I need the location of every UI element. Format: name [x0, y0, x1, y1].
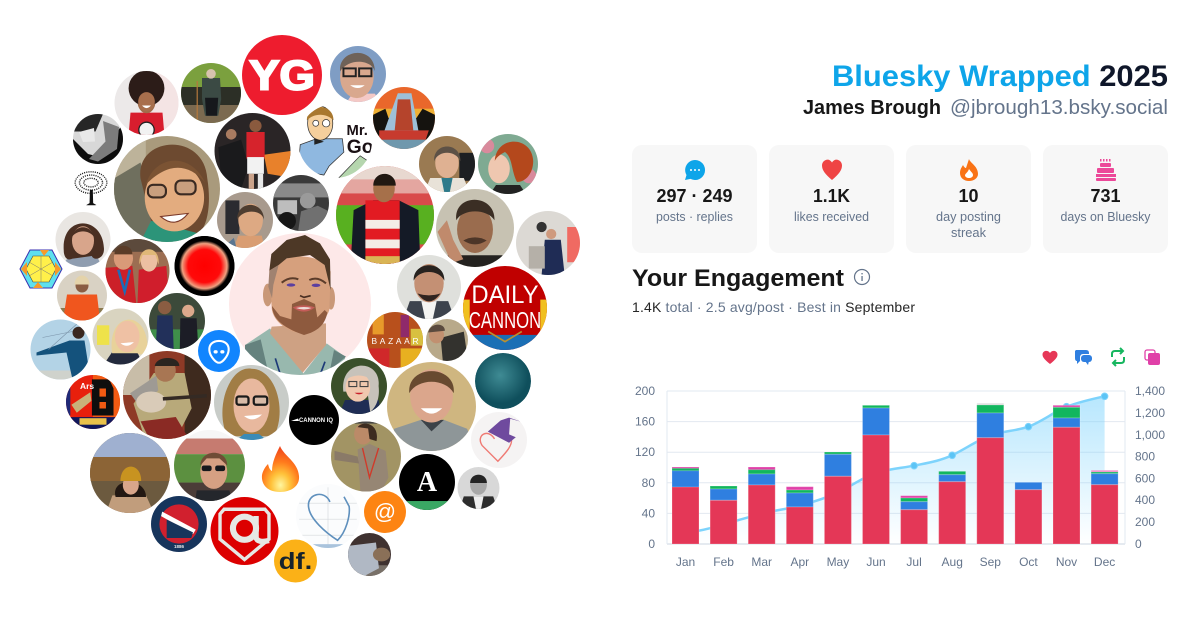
avatar: navy cannon badge: 1886	[174, 544, 184, 549]
avatar: cartoon woman in Arsenal kit	[114, 70, 178, 138]
avatar: Cannon IQ logo	[289, 395, 339, 445]
avatar: man at whiteboard	[30, 320, 90, 380]
avatar: Mr Go cartoon: Mr.	[347, 123, 368, 139]
avatar: man in sunglasses at stadium	[174, 430, 245, 501]
avatar: short haired woman	[217, 192, 273, 248]
stat label: posts · replies	[656, 210, 733, 224]
avatar: A logo: A	[417, 467, 438, 498]
avatar: lecturer with lanyard	[331, 422, 401, 492]
bar: July	[901, 496, 928, 544]
bar: April	[786, 487, 813, 544]
month labels: Jun	[866, 555, 886, 569]
avatar: blonde woman	[92, 308, 148, 364]
month labels: Feb	[713, 555, 734, 569]
left axis labels: 0	[648, 537, 655, 551]
avatar: man with cat	[426, 319, 468, 361]
avatar: two men on basketball court	[149, 293, 205, 349]
month labels: Nov	[1056, 555, 1077, 569]
left axis labels	[635, 384, 655, 551]
left axis labels: 40	[642, 506, 655, 520]
user name: James Brough	[803, 97, 941, 119]
panel: avatar cluster	[20, 35, 580, 582]
bar: August	[939, 471, 966, 544]
month labels: Jan	[676, 555, 695, 569]
stat: days value: 731	[1090, 186, 1120, 206]
month labels: Mar	[751, 555, 772, 569]
avatar: Daily Cannon logo	[463, 266, 547, 350]
icon: speech bubble	[685, 160, 705, 180]
right axis labels: 0	[1135, 537, 1142, 551]
month labels: Apr	[790, 555, 809, 569]
avatar: tree drawing	[73, 170, 109, 206]
avatar: couple in Arsenal shirts	[106, 239, 170, 303]
avatar: Mr Go cartoon	[298, 104, 374, 178]
avatar: smiling man in check shirt	[387, 362, 476, 451]
right axis labels	[1135, 384, 1165, 551]
right axis labels: 1,400	[1135, 384, 1165, 398]
icon: flame	[960, 159, 978, 181]
avatar: Arsenal and Giants logo: Ars	[80, 381, 94, 391]
avatar: Cannon IQ logo: CANNON IQ	[299, 417, 333, 424]
avatar: black and white portrait	[73, 114, 123, 164]
chart legend	[1042, 348, 1160, 366]
cumulative line	[686, 396, 1105, 533]
heading: Your Engagement: Your Engagement	[632, 265, 844, 292]
stacked bars	[672, 403, 1118, 544]
right axis labels: 1,000	[1135, 428, 1165, 442]
panel: posts and replies	[632, 145, 757, 253]
avatar: main profile portrait	[229, 233, 371, 375]
engagement summary: 1.4K total · 2.5 avg/post · Best in September	[632, 299, 915, 315]
avatar: teal ocean	[475, 353, 531, 409]
bar: November	[1053, 405, 1080, 544]
bar: October	[1015, 482, 1042, 544]
avatar: Arsenal player and steward	[214, 113, 290, 189]
left axis labels: 160	[635, 414, 655, 428]
right axis labels: 400	[1135, 493, 1155, 507]
month labels: May	[827, 555, 849, 569]
user handle: @jbrough13.bsky.social	[950, 97, 1168, 119]
panel: likes received	[769, 145, 894, 253]
stat label: day posting	[936, 210, 1001, 224]
right axis labels: 800	[1135, 450, 1155, 464]
bar: September	[977, 403, 1004, 544]
bar: January	[672, 467, 699, 544]
icon: quotes	[1145, 350, 1160, 365]
avatar: YG logo	[242, 35, 322, 115]
avatar: man black and white	[458, 467, 500, 509]
avatar: hexagon pattern	[20, 250, 62, 288]
month labels: Oct	[1019, 555, 1038, 569]
icon: likes	[1042, 351, 1058, 364]
icon: cake	[1096, 159, 1116, 181]
avatar: Bazaar market: BAZAAR	[371, 336, 419, 346]
month labels: Dec	[1094, 555, 1115, 569]
avatar: old man in park	[181, 63, 241, 123]
right axis labels: 200	[1135, 515, 1155, 529]
right axis labels: 1,200	[1135, 406, 1165, 420]
avatar: Daily Cannon logo: DAILY	[471, 281, 539, 309]
icon: reposts	[1112, 348, 1124, 366]
month labels	[676, 555, 1115, 569]
avatar: heart with wizard hat	[471, 412, 527, 468]
avatar: Daily Cannon logo: CANNON	[469, 307, 541, 333]
avatar: red haired woman	[478, 134, 538, 194]
stat: streak value: 10	[958, 186, 978, 206]
avatar: woman in yellow hat	[90, 433, 170, 513]
right axis labels: 600	[1135, 472, 1155, 486]
avatar: YG logo: YG	[249, 51, 315, 98]
panel: days on Bluesky	[1043, 145, 1168, 253]
avatar: A logo	[399, 454, 455, 510]
avatar: df logo: df.	[279, 548, 312, 574]
bar: February	[710, 486, 737, 544]
avatar: laptop and cat	[348, 533, 391, 576]
avatar: df logo	[274, 540, 317, 582]
avatar: curly haired man	[436, 189, 514, 267]
month labels: Sep	[980, 555, 1001, 569]
bar: June	[862, 405, 890, 544]
panel: posting streak	[906, 145, 1031, 253]
icon: info	[854, 270, 870, 284]
stat label: likes received	[794, 210, 869, 224]
cumulative area	[686, 396, 1105, 544]
month labels: Jul	[906, 555, 922, 569]
avatar: navy cannon badge	[151, 496, 207, 552]
avatar: woman with curly hair and glasses	[214, 365, 289, 440]
avatar: fire emoji	[262, 446, 299, 492]
bar: March	[748, 467, 775, 544]
title: Bluesky Wrapped 2025	[832, 60, 1168, 93]
left axis labels: 120	[635, 445, 655, 459]
stat label second line: streak	[951, 226, 987, 240]
avatar: red circle on black	[174, 236, 234, 296]
avatar: Bazaar market	[367, 312, 423, 368]
left axis labels: 200	[635, 384, 655, 398]
avatar: man in suit smiling	[397, 255, 461, 319]
avatar: red Arseblog badge	[210, 497, 278, 565]
avatar: woman with silver hair	[331, 358, 387, 414]
avatar: orange at sign: @	[374, 499, 396, 524]
left axis labels: 80	[642, 476, 655, 490]
avatar: woman with glasses	[114, 136, 220, 242]
avatar: orange painting	[373, 87, 435, 149]
avatar: man with glasses	[330, 46, 386, 102]
month labels: Aug	[942, 555, 963, 569]
avatar: orange at sign	[364, 491, 406, 533]
avatar: Arsenal and Giants logo	[66, 375, 120, 429]
stat: likes value: 1.1K	[813, 186, 850, 206]
avatar: man in Arsenal scarf	[336, 166, 434, 264]
avatar: Mr Go cartoon: Go	[347, 137, 374, 158]
chart: monthly engagement	[635, 384, 1165, 569]
stat label: days on Bluesky	[1060, 210, 1151, 224]
line markers	[911, 393, 1108, 469]
avatar: speaker at lectern	[516, 211, 580, 275]
avatar: heart chart	[296, 484, 360, 548]
avatar: blue alien icon	[198, 330, 240, 372]
avatar: man in orange jumper	[57, 270, 107, 320]
stat: posts and replies value: 297 · 249	[656, 186, 732, 206]
avatar: woman with curly hair	[56, 212, 110, 267]
icon: heart	[822, 160, 842, 180]
bar: December	[1091, 470, 1118, 544]
avatar: black and white camera man	[273, 175, 329, 231]
avatar: woman in library	[419, 136, 476, 192]
icon: replies	[1075, 350, 1092, 365]
avatar: man with guitar	[123, 351, 211, 439]
bar: May	[824, 452, 851, 544]
